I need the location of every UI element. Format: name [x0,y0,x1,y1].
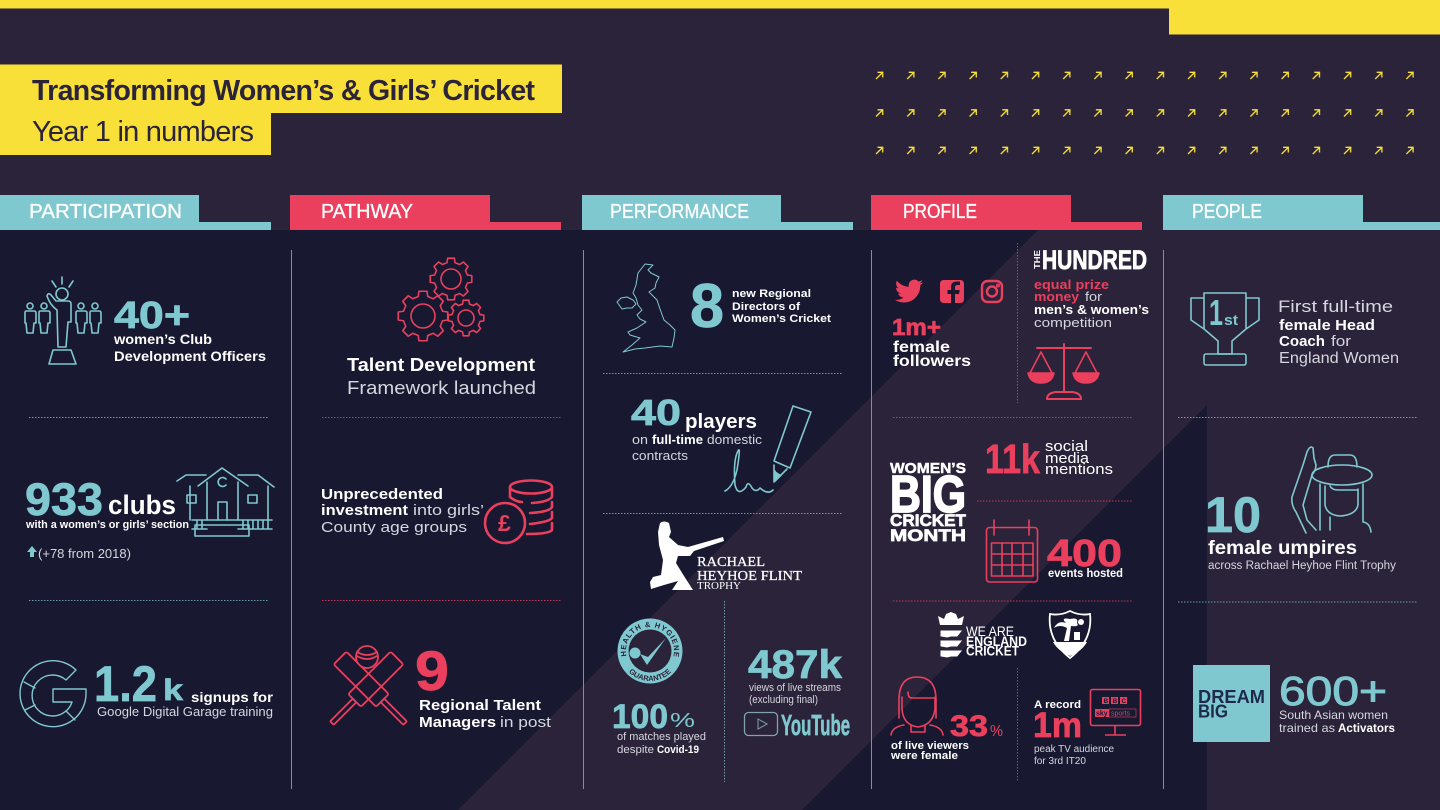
top yellow bar [0,0,1440,34]
text: first female head coach [1278,297,1399,367]
logo: We Are England Cricket: WE ARE [966,623,1014,639]
stat: 100% matches: of matches played [617,731,706,743]
text: talent development framework: Talent Development [347,355,535,375]
logo: Women's Big Cricket Month: WOMEN’S [890,460,966,477]
stat: 487k views [748,643,843,706]
icon: pound coins: £ [498,510,511,536]
title block [0,64,562,155]
decorative arrow grid [875,71,1437,184]
icon: pen and signature [725,406,811,492]
stat: record 1m TV audience: for 3rd IT20 [1034,756,1086,767]
tab: people [1163,195,1440,230]
text: equal prize money: men’s & women’s [1034,302,1149,317]
tab: performance [582,195,853,230]
stat: 100% matches: % [670,710,695,732]
logo: Dream Big: DREAM [1198,687,1265,707]
text: equal prize money [1034,277,1149,330]
stat: 33% viewers: 33 [950,710,988,743]
text: equal prize money: equal prize [1034,277,1109,292]
icon: UK map [617,264,675,352]
stat: 600+ activators: 600+ [1279,668,1387,714]
panel: pathway [290,195,562,731]
icon: calendar [986,520,1038,582]
stat: 40 players: full-time [652,432,703,447]
stat: 8 regional directors: Directors of [732,301,800,313]
stat: 600+ activators: Activators [1338,721,1395,735]
stat: 40+ officers: 40+ [114,295,190,337]
stat: 40 players [631,392,763,463]
stat: 1m+ followers: 1m+ [892,314,941,340]
text: equal prize money: competition [1034,315,1112,330]
stat: 8 regional directors: new Regional [732,288,811,300]
icon: scales [1028,344,1099,399]
logo: Women's Big Cricket Month: MONTH [890,526,966,545]
logo: We Are England Cricket [938,612,1027,658]
icon: facebook [940,280,964,303]
icon: 1st trophy: st [1224,312,1238,329]
stat: 100% matches [612,698,706,756]
stat: 1m+ followers: followers [893,353,971,370]
stat: 40 players: domestic [707,432,763,447]
tab: pathway: PATHWAY [321,201,413,223]
panel: people [1163,195,1440,742]
logo: Women's Big Cricket Month: CRICKET [890,511,967,530]
logo: Rachael Heyhoe Flint Trophy: TROPHY [697,581,741,592]
badge: health and hygiene guarantee: GUARANTEE [630,668,672,681]
logo: Dream Big: BIG [1198,702,1228,722]
icon: TV with BBC and Sky Sports [1090,690,1140,735]
panel: profile [871,195,1149,782]
stat: 9 talent managers: Managers [419,714,496,731]
note: +78 from 2018: (+78 from 2018) [38,546,131,561]
text: equal prize money: money [1034,289,1080,304]
logo: Rachael Heyhoe Flint Trophy: RACHAEL [697,555,765,570]
logo: Women's Big Cricket Month [890,460,967,545]
stat: 33% viewers: were female [890,750,958,762]
stat: 1.2k signups [94,656,274,719]
icon: twitter [895,280,923,302]
stat: 11k mentions [985,436,1113,482]
logo: We Are England Cricket: CRICKET [966,644,1020,658]
logo: YouTube [744,710,850,742]
panel: participation [0,195,274,727]
icon: TV with BBC and Sky Sports: sky [1096,710,1108,718]
badge: health and hygiene guarantee: HEALTH & HYGIENE [620,622,680,657]
icon: TV with BBC and Sky Sports: B [1112,698,1118,705]
logo: We Are England Cricket: ENGLAND [966,634,1027,649]
stat: 11k mentions: media [1045,451,1090,467]
logo: Dream Big [1193,665,1270,742]
stat: 40+ officers [113,295,266,364]
stat: 9 talent managers: 9 [415,639,449,702]
stat: 487k views: 487k [748,643,843,687]
stat: 1.2k signups: signups for [191,689,274,705]
stat: record 1m TV audience: 1m [1033,706,1082,745]
icon: woman silhouette [891,677,943,735]
subtitle: Year 1 in numbers [32,116,254,148]
stat: 8 regional directors: 8 [690,272,724,341]
stat: 1m+ followers [892,314,971,370]
stat: 33% viewers [890,710,1003,762]
stat: 933 clubs: clubs [108,490,176,520]
stat: 40 players: contracts [632,448,689,463]
stat: 600+ activators: trained as [1279,721,1335,735]
text: equal prize money: for [1085,289,1103,304]
tab: profile [871,195,1142,230]
stat: 10 umpires: female umpires [1208,538,1357,559]
stat: 487k views: (excluding final) [749,694,818,706]
logo: West Indies crest [1050,611,1090,658]
stat: 600+ activators [1279,668,1395,735]
stat: 9 talent managers: Regional Talent [419,697,541,714]
stat: 400 events: 400 [1047,533,1122,575]
stat: 8 regional directors: Women’s Cricket [732,313,831,325]
text: first female head coach: female Head [1279,317,1375,334]
stat: 11k mentions: social [1045,439,1088,455]
stat: 9 talent managers [415,639,552,731]
icon: instagram [982,281,1002,302]
stat: 933 clubs: 933 [25,474,103,525]
text: first female head coach: Coach [1279,333,1325,350]
stat: 10 umpires: 10 [1205,487,1261,543]
text: first female head coach: England Women [1279,350,1399,367]
stat: 10 umpires [1205,487,1396,572]
text: first female head coach: First full-time [1278,297,1393,316]
stat: 1m+ followers: female [893,339,950,356]
stat: 10 umpires: across Rachael Heyhoe Flint Trophy [1208,560,1396,572]
icon: 1st trophy: 1 [1209,292,1223,333]
stat: 1.2k signups: 1.2 [94,656,157,712]
logo: The Hundred: THE [1033,249,1042,269]
icon: female umpire [1292,447,1372,533]
icon: leader with group [25,277,101,364]
tab: participation [0,195,271,230]
stat: 40 players: on [632,432,648,447]
stat: 100% matches: despite [617,744,654,756]
stat: 40 players: 40 [631,392,681,433]
text: investment: into girls’ [413,502,484,519]
icon: TV with BBC and Sky Sports: sports [1111,710,1131,718]
stat: 8 regional directors [690,272,831,341]
stat: 33% viewers: of live viewers [891,740,969,752]
logo: Rachael Heyhoe Flint Trophy: HEYHOE FLINT [697,569,802,584]
text: talent development framework [347,355,536,398]
title: Transforming Women’s & Girls’ Cricket [32,75,536,107]
stat: 487k views: views of live streams [749,682,841,694]
icon: gears [398,258,484,341]
stat: record 1m TV audience [1033,699,1114,767]
stat: 600+ activators: South Asian women [1279,708,1388,722]
text: investment: County age groups [321,519,467,536]
stat: 40 players: players [685,411,757,433]
tab: participation: PARTICIPATION [29,201,182,223]
stat: 33% viewers: % [990,723,1003,740]
stat: 933 clubs [25,474,189,531]
stat: 40+ officers: women’s Club [113,332,212,347]
stat: 100% matches: Covid-19 [657,744,699,756]
tab: performance: PERFORMANCE [610,201,749,223]
icon: TV with BBC and Sky Sports: C [1122,698,1126,705]
panel: performance [582,195,853,782]
icon: clubhouse [177,468,274,536]
badge: health and hygiene guarantee [618,618,682,684]
tab: people: PEOPLE [1192,201,1262,223]
stat: record 1m TV audience: A record [1034,699,1081,711]
text: investment: Unprecedented [321,486,443,503]
stat: 100% matches: 100 [612,698,668,736]
stat: 400 events: events hosted [1048,568,1123,580]
tab: profile: PROFILE [903,201,977,223]
icon: 1st trophy [1191,292,1259,365]
stat: 933 clubs: with a women’s or girls’ section [25,519,189,531]
stat: 9 talent managers: in post [500,714,552,731]
text: investment: investment [321,502,408,519]
icon: crossed bats and ball [326,646,411,729]
tab: pathway [290,195,561,230]
stat: 40+ officers: Development Officers [114,349,266,364]
stat: 11k mentions: 11k [985,436,1040,482]
stat: 11k mentions: mentions [1045,462,1113,478]
icon: google G [20,661,86,727]
stat: 1.2k signups: k [163,674,183,707]
text: investment [321,486,484,536]
text: first female head coach: for [1331,333,1351,350]
icon: TV with BBC and Sky Sports: B [1104,698,1108,705]
stat: 1.2k signups: Google Digital Garage training [97,704,273,719]
logo: Rachael Heyhoe Flint Trophy [650,522,802,592]
logo: The Hundred: HUNDRED [1042,245,1147,275]
text: talent development framework: Framework launched [347,378,536,398]
logo: Women's Big Cricket Month: BIG [890,466,966,524]
stat: record 1m TV audience: peak TV audience [1034,744,1114,755]
logo: YouTube: YouTube [781,710,850,742]
icon: pound coins [485,480,552,543]
